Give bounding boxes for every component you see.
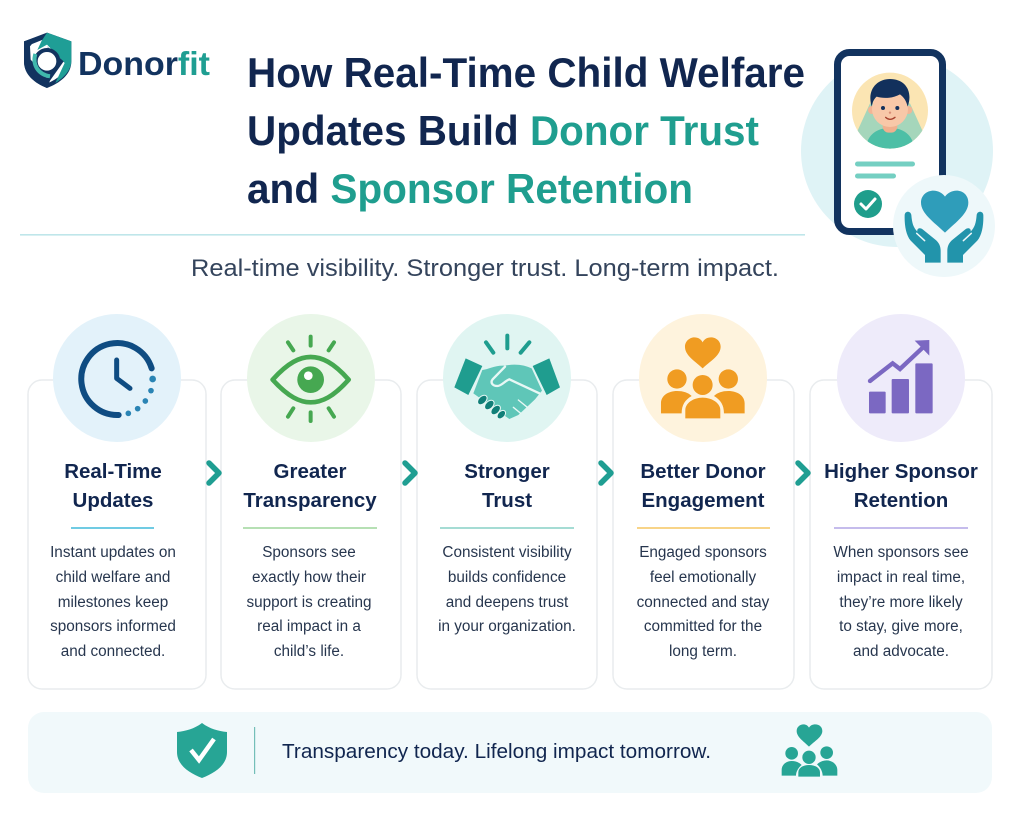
description: impact in real time, bbox=[837, 569, 965, 586]
description: and advocate. bbox=[853, 643, 949, 660]
description: real impact in a bbox=[257, 618, 361, 635]
panel: Stronger Trust bbox=[417, 314, 597, 689]
description: exactly how their bbox=[252, 569, 366, 586]
header divider bbox=[20, 234, 805, 236]
description: connected and stay bbox=[637, 594, 770, 611]
child avatar bbox=[852, 72, 928, 149]
description: milestones keep bbox=[58, 594, 168, 611]
panel: Real-Time Updates bbox=[28, 314, 206, 689]
icon: growth chart bbox=[837, 314, 965, 442]
subtitle: Real-time visibility. Stronger trust. Long-term impact. bbox=[191, 255, 779, 282]
arrow: step 1 to 2 bbox=[209, 463, 219, 483]
description: Instant updates on bbox=[50, 544, 176, 561]
heading: Stronger bbox=[464, 460, 550, 483]
description: committed for the bbox=[644, 618, 762, 635]
description: to stay, give more, bbox=[839, 618, 963, 635]
description: feel emotionally bbox=[650, 569, 756, 586]
title: Updates Build Donor Trust bbox=[247, 107, 759, 154]
description: Sponsors see bbox=[262, 544, 356, 561]
heading: Higher Sponsor bbox=[824, 460, 978, 483]
panel: Greater Transparency bbox=[221, 314, 401, 689]
description: support is creating bbox=[246, 594, 372, 611]
logo wordmark: Donorfit bbox=[78, 45, 210, 82]
phone bbox=[838, 52, 942, 232]
heading: Transparency bbox=[243, 489, 377, 512]
heading: Retention bbox=[854, 489, 948, 512]
heading: Better Donor bbox=[640, 460, 766, 483]
heading: Engagement bbox=[641, 489, 765, 512]
panel: Higher Sponsor Retention bbox=[810, 314, 992, 689]
icon: clock bbox=[53, 314, 181, 442]
description: long term. bbox=[669, 643, 737, 660]
description: Engaged sponsors bbox=[639, 544, 767, 561]
icon: eye bbox=[247, 314, 375, 442]
description: child welfare and bbox=[56, 569, 170, 586]
logo: Donorfit bbox=[24, 33, 210, 88]
description: Consistent visibility bbox=[442, 544, 572, 561]
footer banner bbox=[28, 712, 992, 793]
arrow: step 4 to 5 bbox=[798, 463, 808, 483]
description: and deepens trust bbox=[446, 594, 569, 611]
profile text lines bbox=[855, 162, 915, 166]
tagline: Transparency today. Lifelong impact tomorrow. bbox=[282, 741, 711, 763]
description: When sponsors see bbox=[833, 544, 969, 561]
icon: shield check bbox=[177, 723, 227, 778]
panel: Better Donor Engagement bbox=[613, 314, 794, 689]
icon: logo shield bbox=[24, 33, 71, 88]
heading: Real-Time bbox=[64, 460, 162, 483]
description: child’s life. bbox=[274, 643, 344, 660]
title: and Sponsor Retention bbox=[247, 165, 693, 212]
title: How Real-Time Child Welfare bbox=[247, 49, 805, 96]
description: and connected. bbox=[61, 643, 165, 660]
description: sponsors informed bbox=[50, 618, 176, 635]
arrow: step 3 to 4 bbox=[601, 463, 611, 483]
description: builds confidence bbox=[448, 569, 566, 586]
illustration: phone with child profile and caring hands bbox=[801, 52, 995, 277]
icon: heart in hands bbox=[893, 175, 995, 277]
icon: handshake bbox=[443, 314, 571, 442]
description: in your organization. bbox=[438, 618, 576, 635]
icon: check badge bbox=[854, 190, 882, 218]
background circle bbox=[801, 55, 993, 247]
heading: Greater bbox=[274, 460, 346, 483]
title bbox=[247, 49, 805, 212]
heading: Trust bbox=[482, 489, 532, 512]
heading: Updates bbox=[73, 489, 153, 512]
description: they’re more likely bbox=[839, 594, 963, 611]
icon: people with heart bbox=[639, 314, 767, 442]
icon: community with heart bbox=[782, 724, 837, 777]
arrow: step 2 to 3 bbox=[405, 463, 415, 483]
